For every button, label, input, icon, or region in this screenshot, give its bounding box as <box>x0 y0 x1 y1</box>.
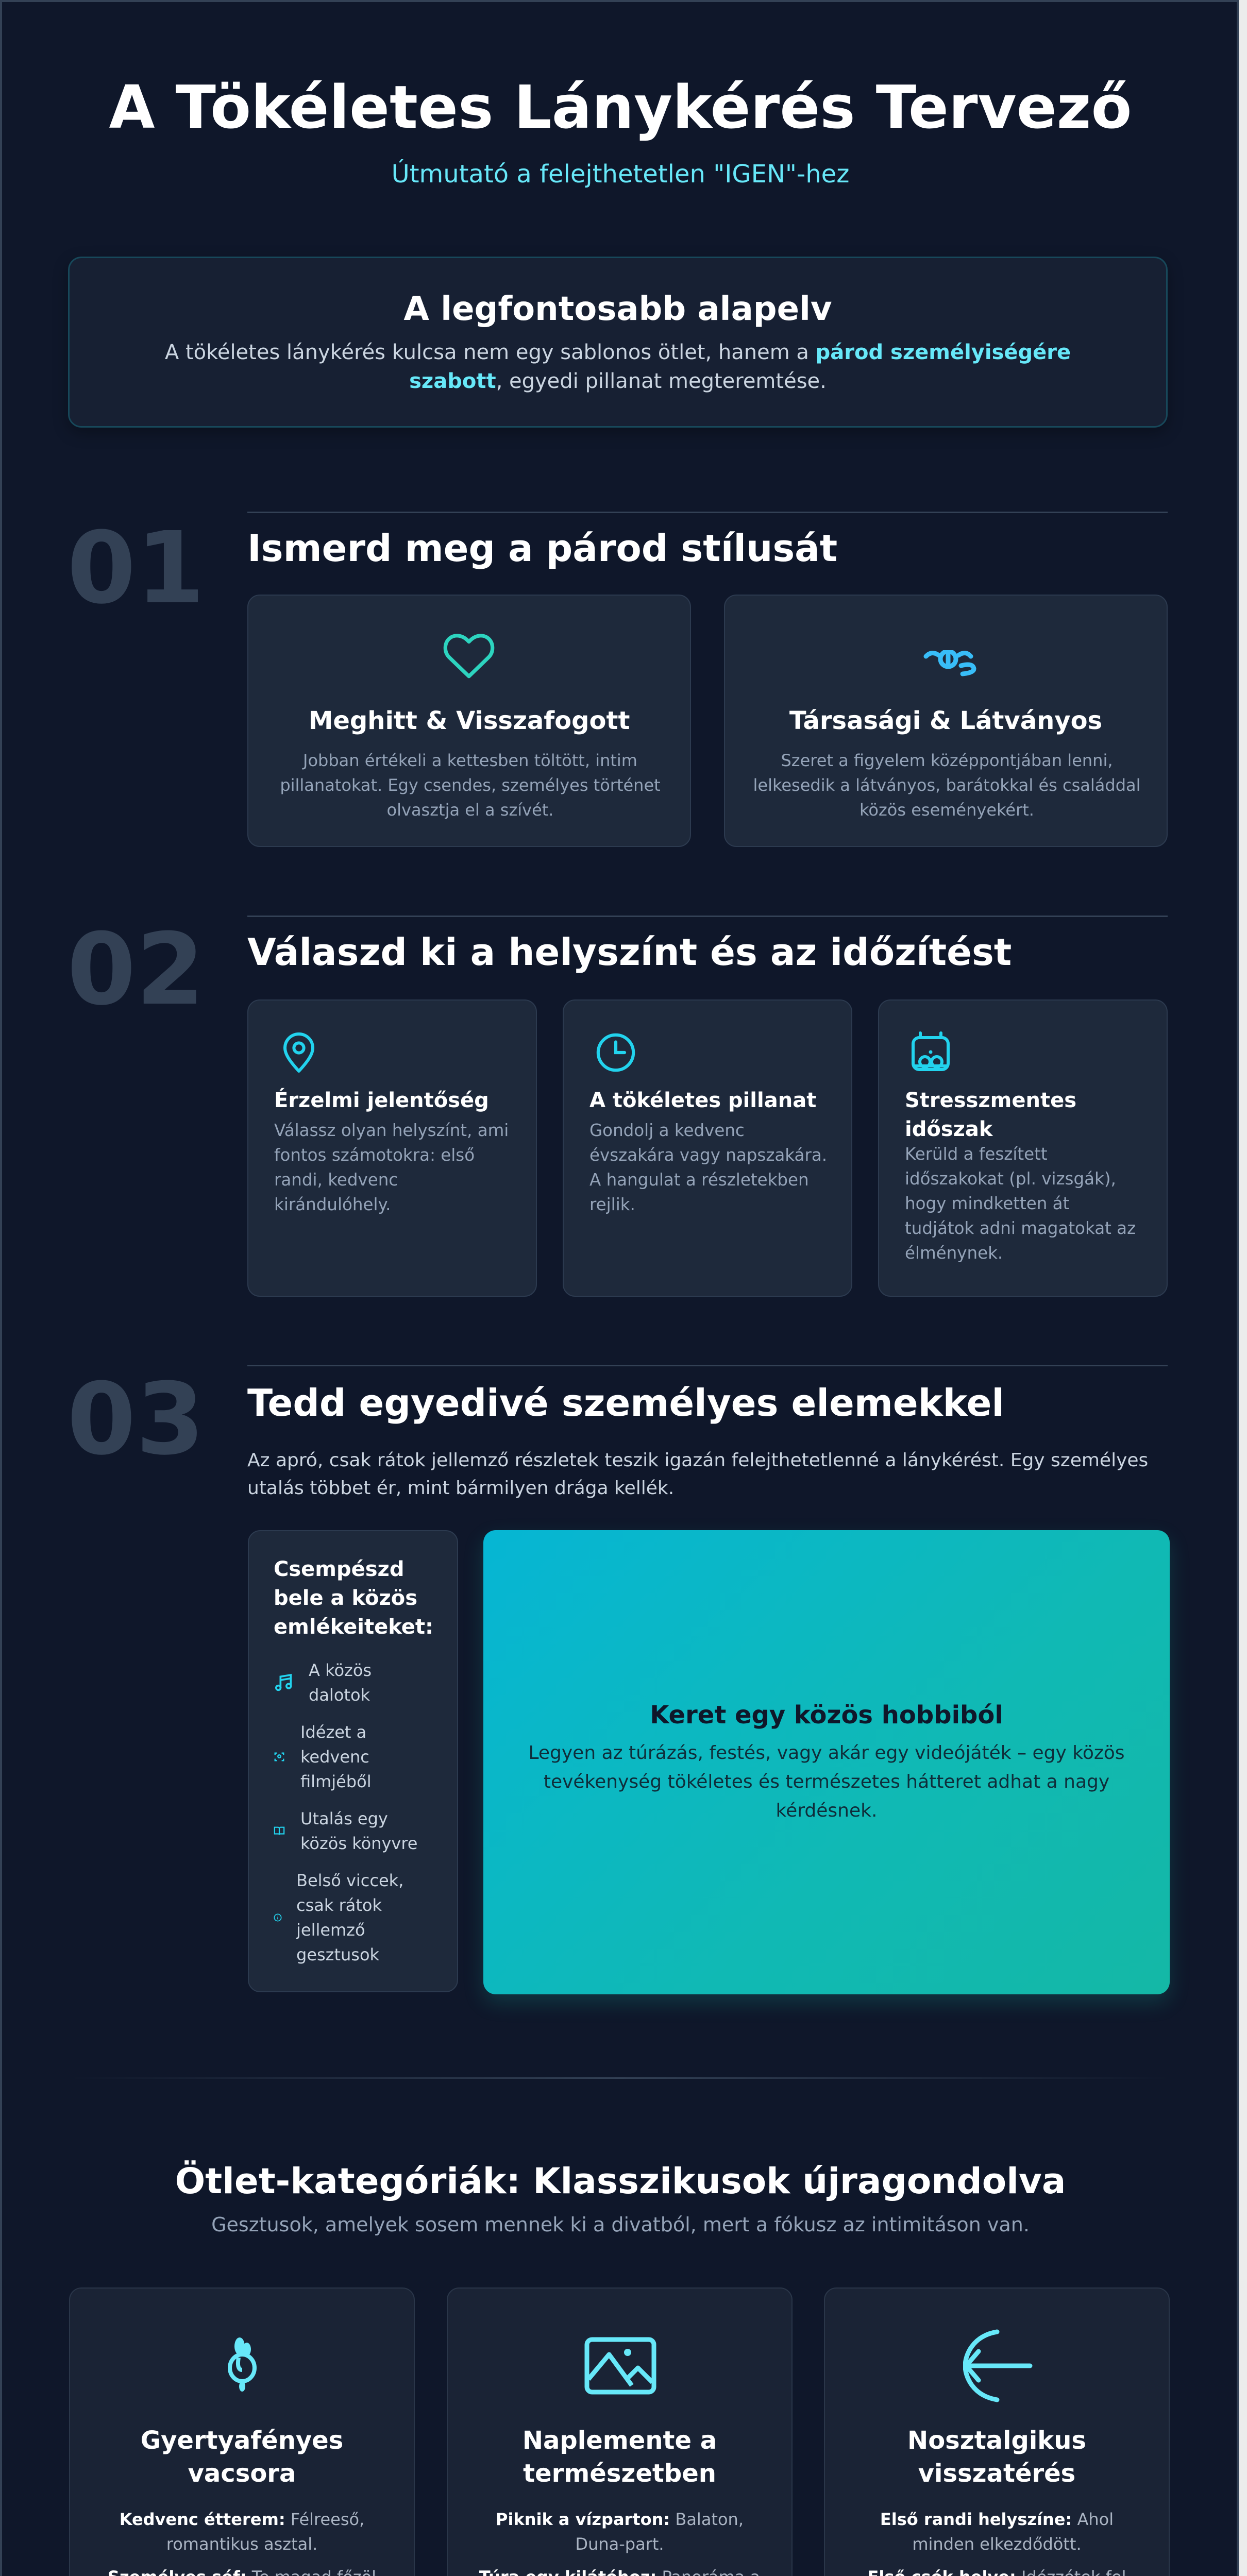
icon: return arrow <box>963 2330 1033 2402</box>
list item: songs: A közös dalotok <box>309 1660 372 1705</box>
card: stresszmentes <box>878 999 1168 1297</box>
list heading: Csempészd bele a közös emlékeiteket: <box>274 1557 433 1639</box>
icon: candle <box>228 2337 257 2392</box>
icon: heart <box>443 634 495 678</box>
card title: Társasági & Látványos <box>789 706 1102 735</box>
panel: memories list <box>248 1530 458 1992</box>
title: A Tökéletes Lánykérés Tervező <box>109 73 1132 142</box>
icon: social <box>923 650 976 676</box>
heading: principle: A legfontosabb alapelv <box>403 290 832 328</box>
icon: calendar <box>912 1031 950 1071</box>
card text: Kerüld a feszített időszakokat (pl. vizsgák), hogy mindketten át tudjátok adni magatokat az élménynek. <box>905 1144 1136 1263</box>
card: sunset nature <box>447 2287 793 2576</box>
subtitle: idea categories: Gesztusok, amelyek sosem mennek ki a divatból, mert a fókusz az intimitáson van. <box>211 2213 1030 2236</box>
list item: film quote: Idézet a kedvenc filmjéből <box>300 1722 372 1791</box>
card items: Kedvenc étterem: Félreeső, romantikus asztal. <box>120 2510 364 2554</box>
card title: Nosztalgikus visszatérés <box>907 2426 1086 2488</box>
card: nostalgic return <box>824 2287 1170 2576</box>
list item: songs <box>275 1660 372 1705</box>
card: candle dinner <box>69 2287 415 2576</box>
subtitle: Útmutató a felejthetetlen "IGEN"-hez <box>392 160 849 189</box>
card text: Válassz olyan helyszínt, ami fontos számotokra: első randi, kedvenc kirándulóhely. <box>274 1121 509 1214</box>
heading: idea categories: Ötlet-kategóriák: Klasszikusok újragondolva <box>175 2161 1066 2202</box>
card items: Első randi helyszíne: Ahol minden elkezdődött. <box>880 2510 1114 2554</box>
section heading 03: Tedd egyedivé személyes elemekkel <box>247 1381 1004 1425</box>
section number 03: 03 <box>67 1362 205 1477</box>
section heading 01: Ismerd meg a párod stílusát <box>247 527 837 570</box>
card: meghitt <box>247 595 691 847</box>
callout text: Legyen az túrázás, festés, vagy akár egy videójáték – egy közös tevékenység tökéletes és természetes hátteret adhat a nagy kérdésnek. <box>528 1742 1125 1821</box>
card text: Szeret a figyelem középpontjában lenni, lelkesedik a látványos, barátokkal és családdal közös eseményekért. <box>753 751 1141 820</box>
callout: hobby frame <box>483 1530 1170 1994</box>
card title: Naplemente a természetben <box>523 2426 717 2488</box>
panel: key principle <box>68 257 1168 428</box>
card title: Gyertyafényes vacsora <box>141 2426 343 2488</box>
icon: clock <box>597 1033 635 1072</box>
card title: A tökéletes pillanat <box>589 1089 816 1112</box>
text: principle: A tökéletes lánykérés kulcsa nem egy sablonos ötlet, hanem a párod személyiségére szabott, egyedi pillanat megteremtése. <box>165 341 1071 393</box>
card text: Gondolj a kedvenc évszakára vagy napszakára. A hangulat a részletekben rejlik. <box>589 1121 827 1214</box>
list item: jokes: Belső viccek, csak rátok jellemző gesztusok <box>296 1871 403 1964</box>
card text: Jobban értékeli a kettesben töltött, intim pillanatokat. Egy csendes, személyes történet olvasztja el a szívét. <box>280 751 661 820</box>
icon: picture <box>584 2337 656 2395</box>
section number 02: 02 <box>67 912 205 1027</box>
card title: Stresszmentes időszak <box>905 1089 1076 1141</box>
section number 01: 01 <box>67 511 205 626</box>
card: tarsasagi <box>724 595 1168 847</box>
card items: Piknik a vízparton: Balaton, Duna-part. <box>496 2510 744 2554</box>
card title: Érzelmi jelentőség <box>274 1089 489 1112</box>
card: pillanat <box>563 999 852 1297</box>
intro text 03: Az apró, csak rátok jellemző részletek teszik igazán felejthetetlenné a lánykérést. Egy személyes utalás többet ér, mint bármilyen drága kellék. <box>247 1450 1148 1499</box>
icon: pin <box>283 1032 314 1073</box>
card: erzelmi <box>247 999 537 1297</box>
section heading 02: Válaszd ki a helyszínt és az időzítést <box>247 930 1012 974</box>
list item: book: Utalás egy közös könyvre <box>300 1809 417 1853</box>
callout heading: Keret egy közös hobbiból <box>650 1701 1003 1730</box>
card title: Meghitt & Visszafogott <box>309 706 630 735</box>
